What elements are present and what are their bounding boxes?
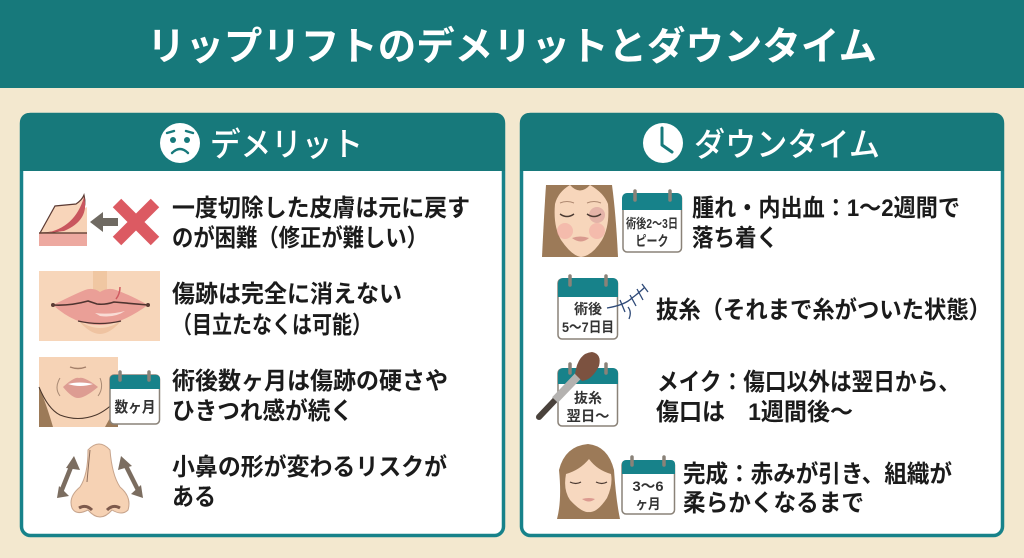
icon: calendar 術後2〜3日 ピーク: 術後2〜3日: [626, 216, 678, 231]
text: item 2: 傷跡は完全に消えない: [172, 281, 402, 308]
icon: calendar 数ヶ月: [110, 372, 160, 424]
icon: stitches: [607, 284, 648, 319]
text: item 3: [172, 368, 448, 425]
text: item 2: （目立たなくは可能）: [172, 312, 372, 339]
heading: デメリット: デメリット: [210, 126, 363, 163]
icon: calendar 3〜6ヶ月: ヶ月: [636, 496, 660, 512]
text: item 4: [683, 460, 952, 517]
text: item 4: 完成：赤みが引き、組織が: [683, 460, 952, 488]
text: item 1: 一度切除した皮膚は元に戻す: [172, 195, 470, 222]
text: item 2: 抜糸（それまで糸がついた状態）: [656, 296, 991, 324]
image: lower face: [39, 357, 118, 427]
text: item 1: [692, 195, 960, 252]
icon: calendar 術後5〜7日目: 術後: [574, 301, 602, 317]
text: item 2: [172, 281, 402, 339]
icon: calendar 数ヶ月: 数ヶ月: [114, 398, 156, 416]
icon: calendar 3〜6ヶ月: 3〜6: [632, 478, 664, 494]
icon: makeup brush: [539, 352, 600, 417]
icon: gray arrow: [90, 212, 118, 232]
icon: clock: [643, 123, 683, 163]
icon: red cross: [117, 203, 155, 241]
text: item 3: メイク：傷口以外は翌日から、: [657, 369, 960, 396]
image: swollen face: [542, 185, 618, 257]
icon: calendar 術後5〜7日目: [558, 276, 618, 339]
heading: ダウンタイム: ダウンタイム: [694, 126, 880, 163]
panel: ダウンタイム: [520, 113, 1004, 536]
text: item 3: ひきつれ感が続く: [172, 397, 353, 425]
icon: calendar 術後2〜3日 ピーク: ピーク: [636, 233, 668, 249]
icon: sad face: [160, 123, 200, 163]
image: nose with arrows: [57, 444, 143, 517]
icon: excised skin: [39, 195, 87, 246]
icon: calendar 抜糸翌日〜: 抜糸: [574, 390, 602, 406]
icon: calendar 術後5〜7日目: 5〜7日目: [562, 319, 614, 335]
text: item 4: 小鼻の形が変わるリスクが: [172, 453, 447, 481]
text: item 4: [172, 453, 447, 511]
text: item 1: [172, 195, 470, 252]
text: item 3: 傷口は 1週間後〜: [656, 399, 853, 426]
icon: calendar 抜糸翌日〜: [558, 364, 618, 426]
text: item 1: のが困難（修正が難しい）: [172, 224, 428, 252]
icon: calendar 3〜6ヶ月: [622, 457, 675, 514]
title banner: [0, 0, 1024, 88]
image: recovered face: [557, 444, 620, 519]
title banner: リップリフトのデメリットとダウンタイム: [147, 25, 877, 69]
text: item 1: 腫れ・内出血：1〜2週間で: [692, 195, 960, 222]
icon: calendar 術後2〜3日 ピーク: [622, 191, 682, 252]
panel: デメリット: [20, 113, 505, 536]
text: item 4: ある: [172, 484, 216, 511]
image: lips with scar: [39, 271, 160, 341]
text: item 4: 柔らかくなるまで: [683, 490, 864, 517]
text: item 1: 落ち着く: [692, 225, 778, 252]
icon: calendar 抜糸翌日〜: 翌日〜: [566, 408, 610, 424]
text: item 3: [656, 369, 960, 426]
text: item 3: 術後数ヶ月は傷跡の硬さや: [172, 368, 448, 395]
